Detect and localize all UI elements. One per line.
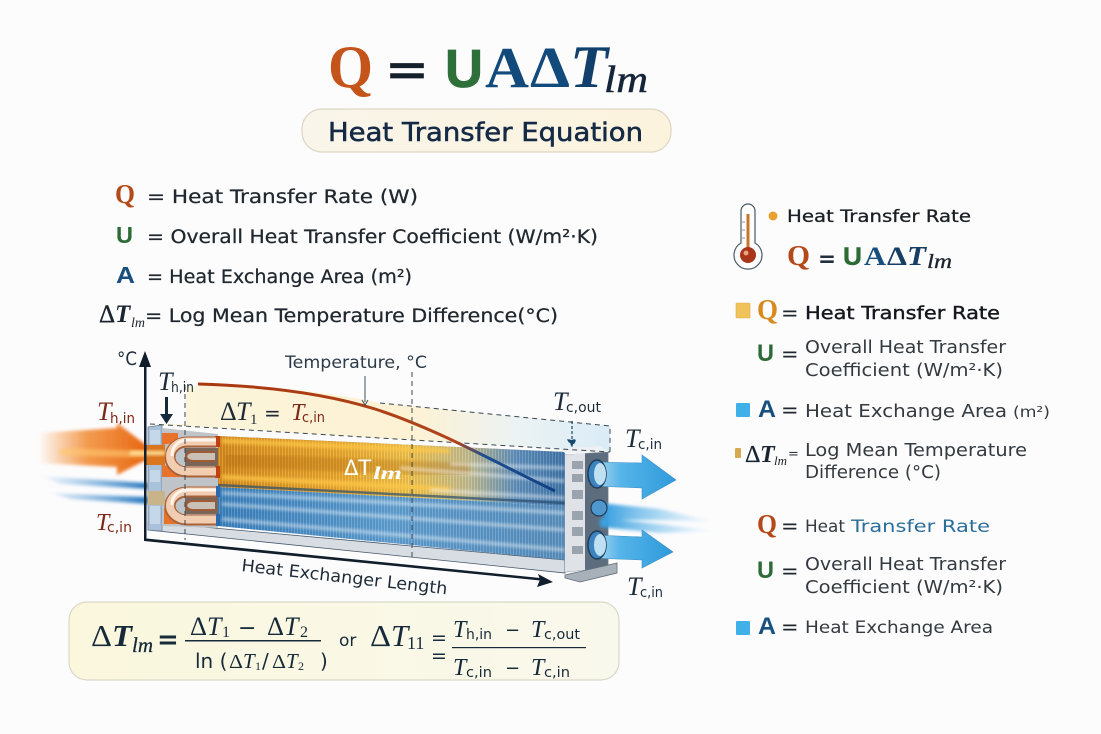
formula: log mean definition: = (157, 625, 179, 655)
diagram labels: c,in (638, 437, 662, 453)
diagram labels: Δ (220, 397, 237, 426)
temperature shaded band (150, 386, 610, 452)
panel: right summary equation: T (907, 241, 928, 271)
panel: right legend first group: = (781, 301, 799, 325)
formula: log mean definition: Δ (272, 651, 286, 673)
formula: alternate expression: − (505, 658, 520, 679)
panel: right legend second group: = (781, 615, 799, 639)
temperature curve (198, 384, 555, 491)
panel: right summary equation: = (818, 247, 836, 272)
panel: right legend second group: Transfer Rate (850, 517, 990, 537)
diagram labels: Temperature, °C (284, 353, 427, 372)
title: main equation: Δ (530, 35, 570, 100)
chart axes (139, 351, 553, 587)
panel: right legend first group: Heat Exchange Area (805, 402, 1007, 422)
formula: alternate expression: = (431, 627, 447, 649)
formula: log mean definition: T (286, 649, 299, 673)
formula: log mean definition: 1 (222, 624, 230, 641)
panel: right legend second group: A (758, 613, 776, 640)
variable definitions list (99, 179, 598, 331)
tube end caps (215, 436, 220, 478)
panel: right summary equation: U (843, 243, 862, 271)
panel: right legend first group: Difference (°C) (805, 463, 941, 483)
diagram labels: T (625, 424, 641, 453)
formula: log mean definition: 2 (298, 659, 304, 673)
panel: right summary equation: A (864, 242, 886, 271)
diagram labels: c,in (640, 585, 663, 601)
diagram labels: T (96, 510, 111, 536)
panel: right legend first group: Log Mean Temperature (805, 441, 1027, 461)
arrow: cold outlet marker (568, 421, 576, 446)
formula: alternate expression: T (453, 655, 468, 681)
diagram labels: T (291, 400, 306, 426)
formula: log mean definition: − (238, 616, 256, 641)
panel: right legend first group: A (758, 396, 776, 423)
diagram labels: = (264, 401, 281, 425)
formula: log mean definition: T (243, 649, 256, 673)
title: main equation: U (445, 39, 483, 99)
upper inner tube (186, 452, 215, 461)
cold outlet upper arrow (592, 455, 676, 499)
formula: log mean definition: lm (132, 633, 153, 657)
panel: right legend first group: T (760, 442, 776, 468)
panel: right legend first group: Δ (745, 442, 760, 468)
diagram labels: 1 (250, 412, 258, 428)
formula: alternate expression: T (531, 655, 546, 681)
formula: alternate expression: − (505, 620, 520, 641)
panel: right summary equation (768, 207, 971, 273)
variable definitions list: Q (115, 179, 135, 209)
variable definitions list: = Log Mean Temperature Difference(°C) (145, 306, 558, 327)
panel: right legend first group: Overall Heat Transfer (805, 338, 1007, 358)
title: main equation: = (385, 40, 429, 100)
panel: right summary equation: lm (927, 251, 952, 273)
panel: right summary equation: Q (787, 241, 810, 272)
diagram labels: h,in (110, 411, 135, 427)
variable definitions list: = Heat Exchange Area (m²) (147, 267, 412, 288)
variable definitions list: U (116, 222, 133, 248)
panel: right legend first group: Q (757, 295, 778, 326)
subtitle pill (302, 109, 671, 152)
panel: right legend second group: Overall Heat Transfer (805, 555, 1007, 575)
formula: log mean definition: Δ (229, 651, 243, 673)
cold outlet middle stream (600, 503, 716, 533)
subtitle pill: Heat Transfer Equation (328, 118, 643, 148)
panel: right legend second group: U (757, 557, 774, 584)
title: main equation: A (485, 35, 529, 100)
panel: right summary equation: Δ (887, 242, 907, 271)
diagram labels: h,in (171, 380, 194, 396)
panel: right legend first group: = (781, 342, 799, 366)
cold inlet flow streams (40, 476, 148, 504)
formula: alternate expression: c,in (466, 665, 492, 681)
panel: right legend second group: = (781, 514, 799, 538)
lower inner tube (186, 501, 215, 510)
variable definitions list: A (116, 262, 135, 288)
cold outlet lower arrow (592, 530, 673, 568)
diagram labels (96, 348, 663, 601)
formula: alternate expression: Δ (370, 618, 391, 653)
panel: right legend first group: Heat Transfer Rate (805, 303, 1000, 324)
panel: right summary equation: Heat Transfer Rate (787, 207, 971, 227)
diagram labels: T (627, 572, 643, 601)
formula: log mean definition (91, 612, 328, 673)
formula: alternate expression: = (431, 645, 447, 667)
x-axis label: Heat Exchanger Length (240, 556, 448, 599)
icon: thermometer (734, 204, 762, 269)
formula: log mean definition: 1 (255, 659, 261, 673)
diagram labels: T (97, 397, 113, 426)
formula: or: or (339, 631, 356, 651)
diagram labels: c,out (566, 400, 602, 416)
diagram labels: c,in (302, 410, 325, 426)
variable definitions list: lm (131, 316, 145, 331)
formula: log mean definition: T (284, 612, 300, 641)
formula: alternate expression: 11 (407, 633, 424, 653)
formula: alternate expression: h,in (466, 627, 492, 643)
title: main equation: Q (328, 34, 373, 100)
diagram labels: c,in (107, 520, 132, 536)
heat exchanger body (130, 425, 617, 582)
formula box (69, 602, 619, 681)
title: main equation: T (570, 34, 610, 100)
lower cold tube row (218, 487, 565, 560)
panel: right legend first group: (m²) (1013, 403, 1050, 421)
variable definitions list: T (115, 301, 132, 328)
formula: log mean definition: Δ (190, 612, 207, 641)
formula: alternate expression (370, 617, 586, 681)
panel: right legend first group (735, 295, 1050, 483)
diagram labels: T (553, 387, 569, 416)
formula: log mean definition: 2 (300, 624, 308, 641)
panel: right legend second group: Heat Exchange Area (805, 618, 993, 638)
diagram labels: T (236, 397, 252, 426)
formula: alternate expression: T (453, 617, 468, 643)
inlet stub pipes (130, 445, 165, 505)
formula: log mean definition: T (112, 618, 133, 653)
formula: alternate expression: c,in (544, 665, 570, 681)
lower U-bend tube (170, 490, 216, 520)
hot inlet flow arrow (38, 423, 150, 475)
arrow: temperature pointer (362, 376, 368, 405)
variable definitions list: Δ (99, 301, 115, 328)
upper U-bend tube (170, 440, 216, 472)
diagram labels: T (158, 367, 174, 396)
dashed guide lines (150, 372, 610, 560)
panel: right legend second group: Heat (805, 517, 845, 537)
formula: log mean definition: ) (320, 649, 328, 673)
header fittings (588, 460, 607, 559)
variable definitions list: = Overall Heat Transfer Coefficient (W/m²·K) (147, 227, 598, 248)
variable definitions list: = Heat Transfer Rate (W) (147, 187, 418, 208)
formula: log mean definition: Δ (91, 618, 112, 653)
right header (560, 446, 617, 582)
fins and highlights (218, 430, 568, 565)
diagram labels: °C (117, 348, 137, 370)
panel: right legend first group: = (788, 447, 799, 462)
formula: alternate expression: c,out (544, 627, 581, 643)
formula: log mean definition: T (207, 612, 223, 641)
panel: right legend second group: = (781, 559, 799, 583)
panel: right legend second group: Q (757, 509, 777, 539)
diagram labels: ΔT (344, 456, 371, 480)
formula: log mean definition: / (262, 649, 269, 673)
exchanger lower frame (148, 522, 565, 573)
panel: right legend second group (736, 509, 1007, 640)
panel: right legend first group: = (781, 398, 799, 422)
title: main equation (328, 34, 648, 101)
panel: right legend first group: U (757, 340, 774, 367)
panel: right legend second group: Coefficient (W/m²·K) (805, 578, 1003, 598)
title: main equation: lm (604, 59, 648, 101)
arrow: hot inlet marker (160, 397, 173, 424)
panel: right legend first group: Coefficient (W/m²·K) (805, 361, 1003, 381)
diagram labels: lm (373, 463, 402, 483)
formula: log mean definition: Δ (267, 612, 284, 641)
exchanger left frame (148, 425, 218, 531)
panel: right legend first group: lm (774, 453, 787, 468)
formula: alternate expression: T (531, 617, 546, 643)
formula: log mean definition: ln ( (195, 649, 227, 673)
upper hot tube row (218, 436, 565, 506)
formula: alternate expression: T (391, 618, 411, 653)
